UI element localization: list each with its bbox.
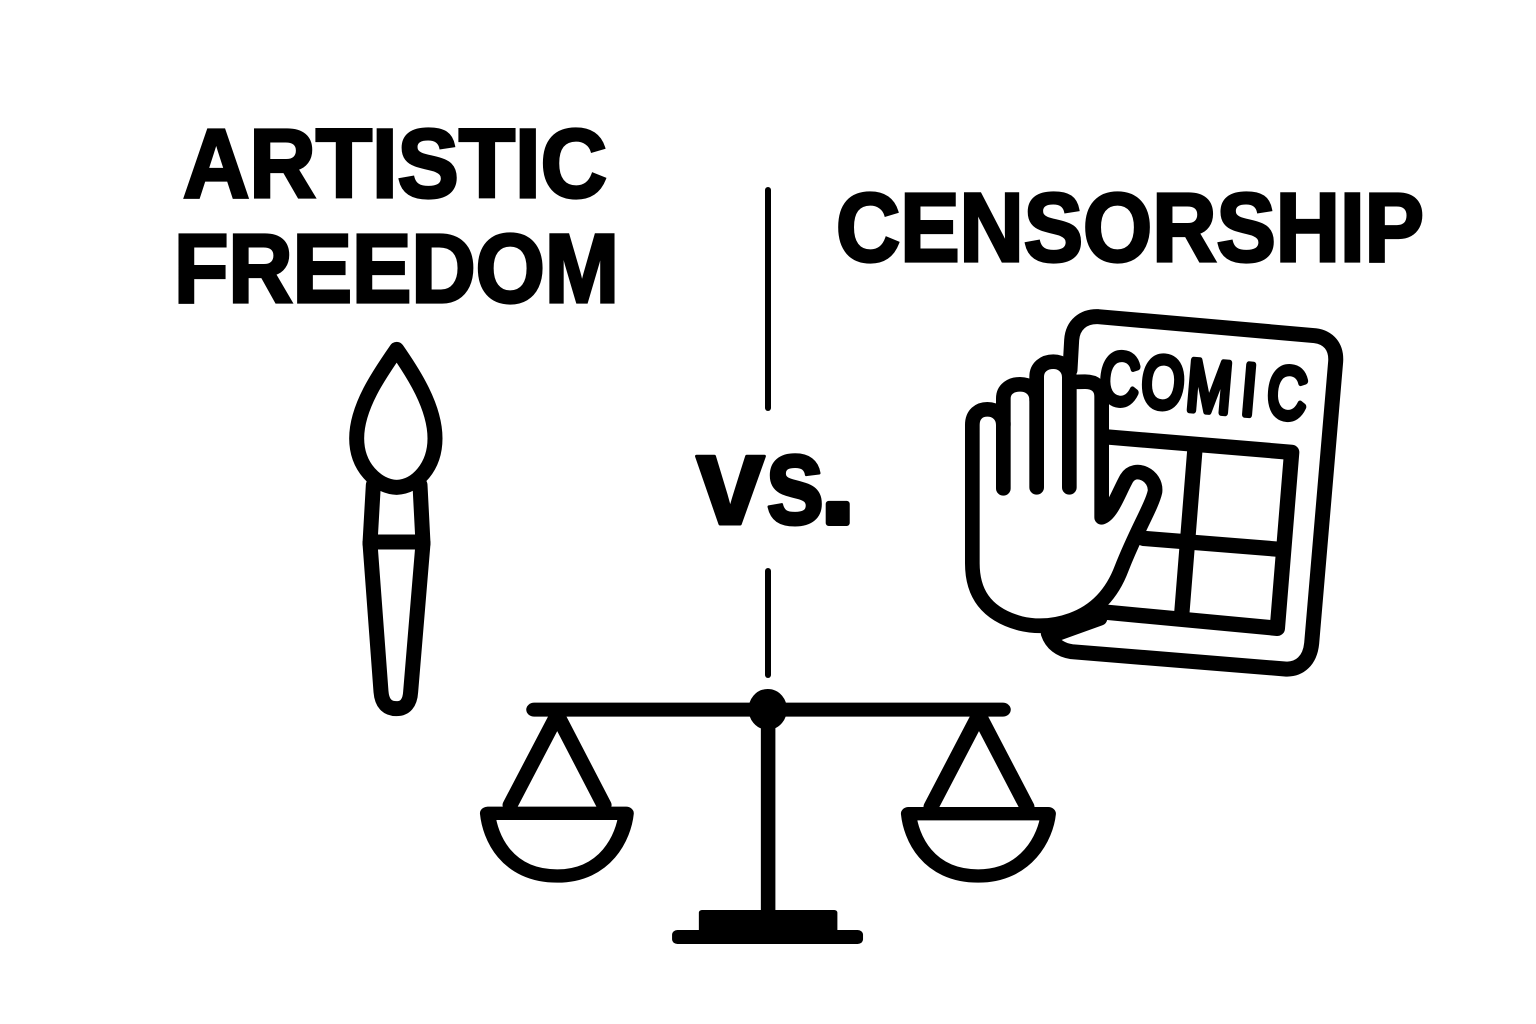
scale beam and pivot [534,696,1003,723]
comic title: COMIC [1097,337,1310,435]
icon: balance scale [488,696,1048,944]
versus label: . [820,408,856,551]
icon: paintbrush [357,349,435,709]
comic book cover [1048,317,1336,669]
right pan [909,715,1048,876]
versus label: s [765,409,825,552]
comic panels [1100,437,1292,628]
heading: artistic freedom: FREEDOM [174,214,619,323]
versus label: v [696,409,765,552]
versus label [696,408,856,552]
post and base [672,727,863,944]
hand [972,362,1155,633]
icon: hand blocking comic book [972,317,1336,669]
vertical divider [765,190,771,675]
heading: artistic freedom: ARTISTIC [183,109,607,218]
heading: artistic freedom [174,109,619,323]
left pan [488,715,626,876]
heading: censorship: CENSORSHIP [836,173,1424,282]
